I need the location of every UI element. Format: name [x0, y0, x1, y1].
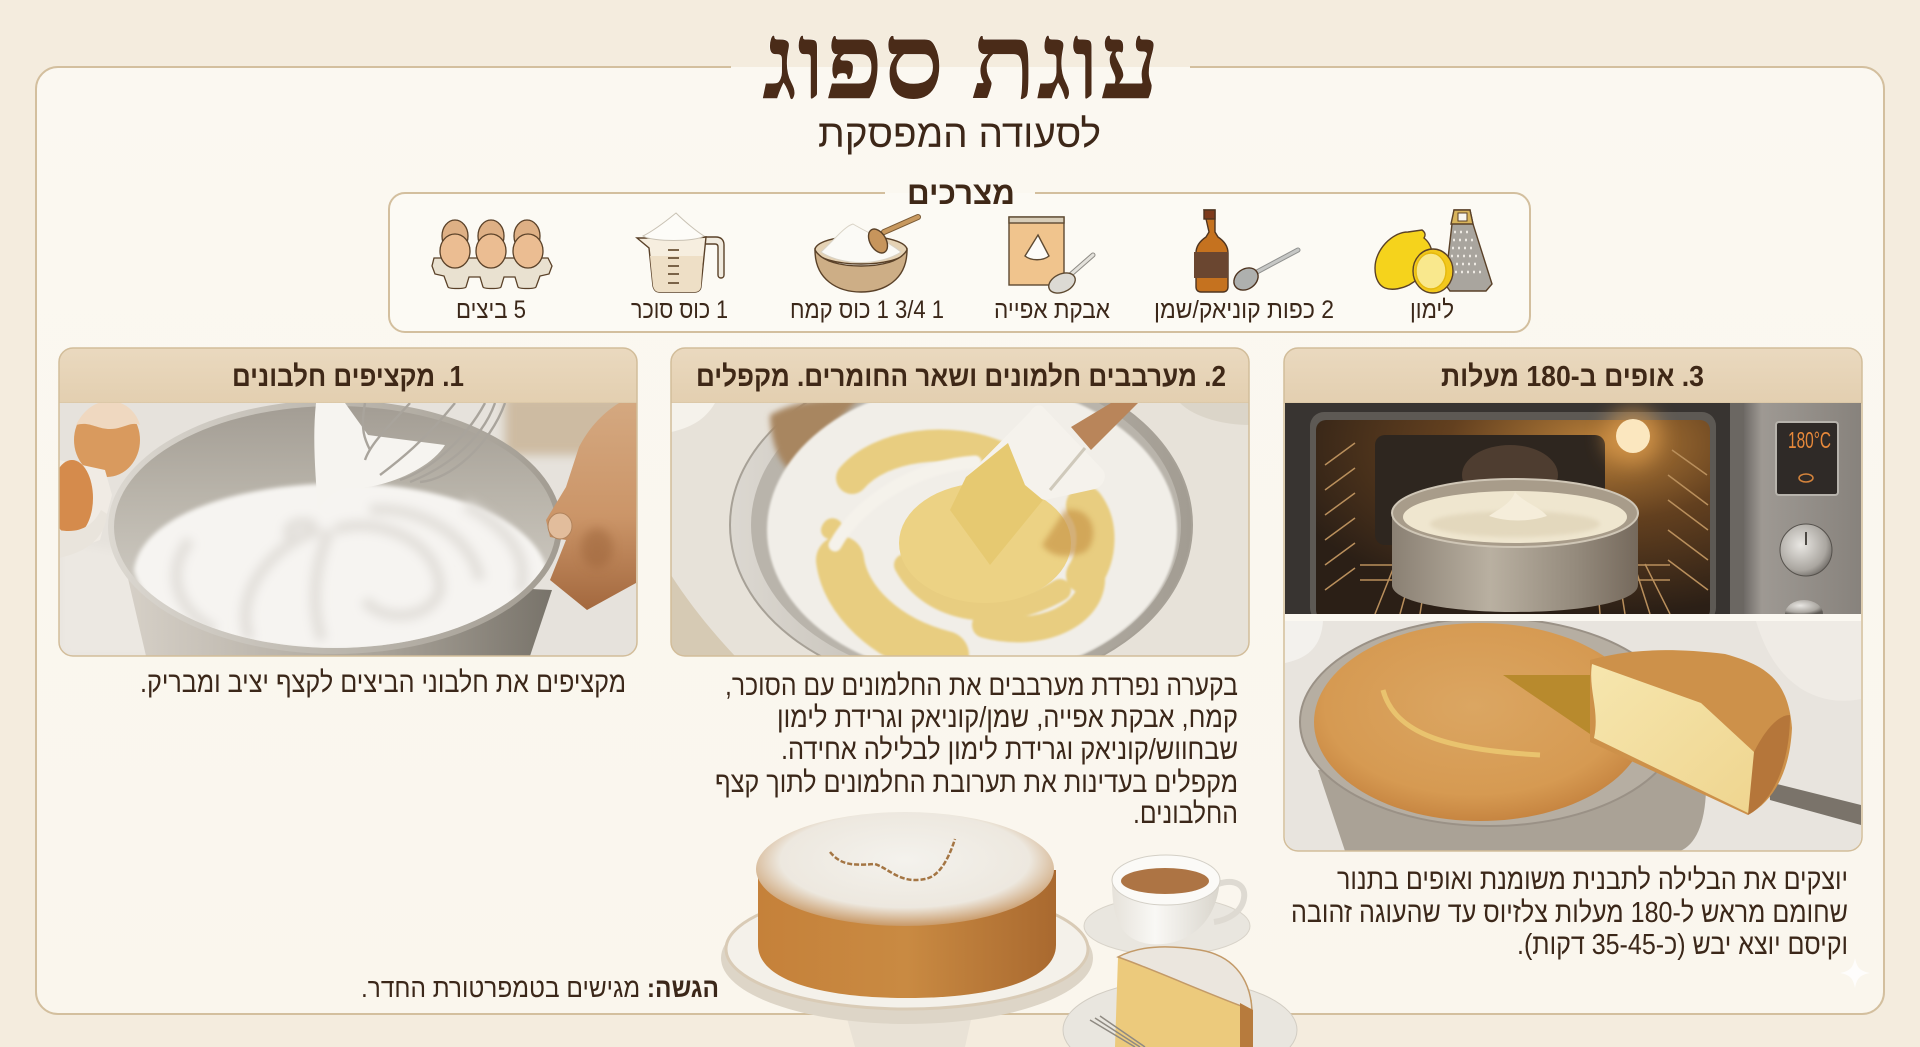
label: cognac or oil: 2 כפות קוניאק/שמן: [1154, 296, 1334, 324]
panel: step 1: [51, 348, 645, 699]
step 3 header: [1284, 348, 1862, 403]
icon: baking powder: [1009, 217, 1093, 297]
step 3 photo: baked cake: [1285, 618, 1861, 851]
step 3 photo: oven: [1285, 403, 1862, 622]
step 1 header: [59, 348, 637, 403]
step 3 card border: [1284, 348, 1862, 851]
label: sugar: 1 כוס סוכר: [631, 296, 728, 324]
step 3 description: וקיסם יוצא יבש (כ-35-45 דקות).: [1517, 929, 1848, 961]
step 2 description: החלבונים.: [1133, 798, 1238, 830]
icon: measuring cup with sugar: [637, 213, 724, 292]
label: baking powder: אבקת אפייה: [994, 296, 1110, 324]
panel: step 3: [1284, 348, 1862, 961]
step 2 description: קמח, אבקת אפייה, שמן/קוניאק וגרידת לימון: [777, 702, 1238, 734]
step 2 card border: [671, 348, 1249, 656]
illustration: coffee cup on saucer: [1084, 855, 1250, 955]
icon: flour bowl: [815, 217, 918, 292]
step 1 description: מקציפים את חלבוני הביצים לקצף יציב ומבריק.: [140, 667, 626, 699]
step 2 header: [671, 348, 1249, 403]
step 3 description: שחומם מראש ל-180 מעלות צלזיוס עד שהעוגה זהובה: [1291, 897, 1848, 929]
subtitle: לסעודה המפסקת: [818, 113, 1101, 156]
step 2 header: 2. מערבבים חלמונים ושאר החומרים. מקפלים: [696, 361, 1226, 393]
step 2 description: מקפלים בעדינות את תערובת החלמונים לתוך קצף: [715, 767, 1238, 799]
title: עוגת ספוג: [762, 4, 1160, 121]
step 2 description: בקערה נפרדת מערבבים את החלמונים עם הסוכר,: [725, 670, 1238, 702]
label: flour: 1 3/4 1 כוס קמח: [790, 296, 944, 324]
illustration: cake on stand: [721, 812, 1093, 1047]
decorative sparkle: [1840, 958, 1870, 988]
step 3 header: 3. אופים ב-180 מעלות: [1441, 361, 1704, 393]
icon: egg tray: [432, 220, 552, 288]
step 2 description: [715, 670, 1238, 830]
step 1 photo: whipped egg whites: [51, 395, 645, 656]
step 3 description: [1291, 864, 1848, 961]
icon: lemon and grater: [1375, 210, 1492, 293]
step 2 photo: folding batter: [672, 403, 1248, 656]
panel: ingredients: [389, 175, 1530, 332]
serving note: הגשה: מגישים בטמפרטורת החדר.: [361, 973, 719, 1003]
oven display: 180°C: [1788, 427, 1831, 453]
step 1 card border: [59, 348, 637, 656]
step 1 header: 1. מקציפים חלבונים: [232, 361, 464, 393]
label: eggs: 5 ביצים: [456, 296, 526, 324]
step 2 description: שבחווש/קוניאק וגרידת לימון לבלילה אחידה.: [781, 734, 1238, 766]
illustration: cake slice on plate: [1063, 947, 1297, 1047]
step 3 description: יוצקים את הבלילה לתבנית משומנת ואופים בתנור: [1337, 864, 1848, 896]
icon: bottle and spoon: [1194, 210, 1298, 295]
ingredients heading: מצרכים: [907, 175, 1015, 211]
panel: step 2: [671, 348, 1249, 830]
label: lemon: לימון: [1410, 296, 1454, 324]
